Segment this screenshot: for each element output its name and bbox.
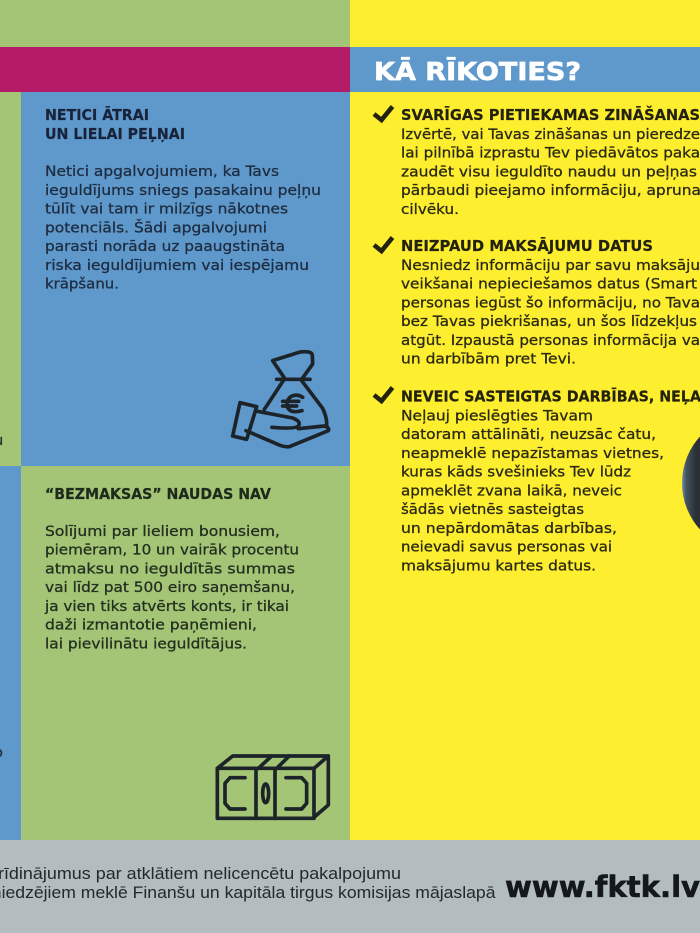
- panel: blue left sliver: [0, 466, 21, 840]
- text block: sufficient knowledge: Izvērtē, vai Tavas zināšanas un pieredze: [401, 126, 700, 143]
- checklist item: do not act hastily: [374, 388, 700, 574]
- footer bar: [0, 840, 700, 933]
- text block: no hasty actions: neapmeklē nepazīstamas vietnes,: [401, 445, 664, 462]
- text block: payment data: Nesniedz informāciju par savu maksāju: [401, 257, 700, 274]
- text block: no hasty actions: Neļauj pieslēgties Tavam: [401, 408, 593, 424]
- text block: no hasty actions: maksājumu kartes datus.: [401, 558, 596, 574]
- text block: payment data: un darbībām pret Tevi.: [401, 350, 576, 368]
- text block: payment data: [401, 257, 700, 368]
- text block: no hasty actions: un nepārdomātas darbības,: [401, 520, 617, 537]
- text block: sufficient knowledge: cilvēku.: [401, 201, 459, 218]
- text block: payment data: atgūt. Izpaustā personas informācija va: [401, 332, 700, 349]
- panel: quick profit warning: [21, 92, 350, 466]
- text block: sufficient knowledge: zaudēt visu ieguldīto naudu un peļņas: [401, 164, 697, 180]
- text block: free money: lai pievilinātu ieguldītājus.: [45, 636, 247, 652]
- text block: quick profit: riska ieguldījumiem vai iespējamu: [45, 257, 309, 274]
- heading: quick profit: [45, 106, 185, 143]
- text block: sufficient knowledge: pārbaudi pieejamo informāciju, apruna: [401, 182, 700, 199]
- heading: free money: “BEZMAKSAS” NAUDAS NAV: [45, 486, 272, 503]
- icon: check mark: [374, 106, 392, 120]
- text block: payment data: personas iegūst šo informāciju, no Tava: [401, 294, 700, 312]
- icon: hand holding euro money bag: [233, 352, 329, 447]
- footer website link: www.fktk.lv: [505, 870, 700, 904]
- text block: payment data: bez Tavas piekrišanas, un šos līdzekļus: [401, 313, 697, 330]
- text block: free money: piemēram, 10 un vairāk procentu: [45, 542, 299, 558]
- text block: payment data: veikšanai nepieciešamos datus (Smart: [401, 276, 697, 292]
- header band: how to act: [350, 47, 700, 92]
- text block: quick profit: potenciāls. Šādi apgalvojumi: [45, 218, 267, 236]
- heading: payment data: NEIZPAUD MAKSĀJUMU DATUS: [401, 237, 653, 255]
- panel: yellow background: [350, 0, 700, 840]
- icon: stack of banknotes: [217, 756, 328, 818]
- text block: free money: vai līdz pat 500 eiro saņemšanu,: [45, 579, 295, 596]
- text block: sufficient knowledge: [401, 126, 700, 218]
- text block: sufficient knowledge: lai pilnībā izprastu Tev piedāvātos paka: [401, 144, 700, 162]
- checklist item: sufficient knowledge: [374, 106, 700, 218]
- heading: quick profit: UN LIELAI PEĻŅAI: [45, 126, 185, 143]
- text block: no hasty actions: kuras kāds svešinieks Tev lūdz: [401, 464, 631, 480]
- heading: sufficient knowledge: SVARĪGAS PIETIEKAMAS ZINĀŠANAS: [401, 106, 700, 124]
- text block: no hasty actions: apmeklēt zvana laikā, neveic: [401, 482, 622, 500]
- icon: check mark: [374, 388, 392, 401]
- text block: no hasty actions: [401, 408, 664, 574]
- text block: free money: ja vien tiks atvērts konts, ir tikai: [44, 598, 289, 615]
- text block: quick profit: krāpšanu.: [45, 276, 119, 292]
- header band: magenta: [0, 47, 350, 92]
- text block: quick profit: tūlīt vai tam ir milzīgs nākotnes: [45, 200, 288, 218]
- panel: green left sliver: [0, 92, 21, 466]
- text block: free money: Solījumi par lieliem bonusiem,: [45, 523, 280, 540]
- footer text: [0, 864, 496, 902]
- text block: quick profit: [45, 163, 321, 292]
- checklist item: keep payment data private: [374, 237, 700, 368]
- text block: free money: daži izmantotie paņēmieni,: [45, 616, 257, 634]
- icon: dark circular device clipped at edge: [682, 414, 700, 552]
- text block: free money: atmaksu no ieguldītās summas: [45, 560, 295, 578]
- icon: check mark: [374, 238, 392, 251]
- text block: no hasty actions: datoram attālināti, neuzsāc čatu,: [401, 426, 656, 443]
- text block: no hasty actions: neievadi savus personas vai: [401, 538, 612, 556]
- heading: how to act: KĀ RĪKOTIES?: [374, 57, 581, 86]
- panel: free money warning: [21, 466, 350, 840]
- text block: quick profit: Netici apgalvojumiem, ka Tavs: [45, 163, 279, 180]
- text block: quick profit: ieguldījums sniegs pasakainu peļņu: [45, 182, 321, 199]
- text block: no hasty actions: šādās vietnēs sasteigtas: [401, 501, 584, 518]
- panel: top green strip: [0, 0, 350, 47]
- text block: free money: [44, 523, 299, 652]
- text block: quick profit: parasti norāda uz paaugstināta: [45, 238, 285, 255]
- heading: quick profit: NETICI ĀTRAI: [45, 106, 149, 124]
